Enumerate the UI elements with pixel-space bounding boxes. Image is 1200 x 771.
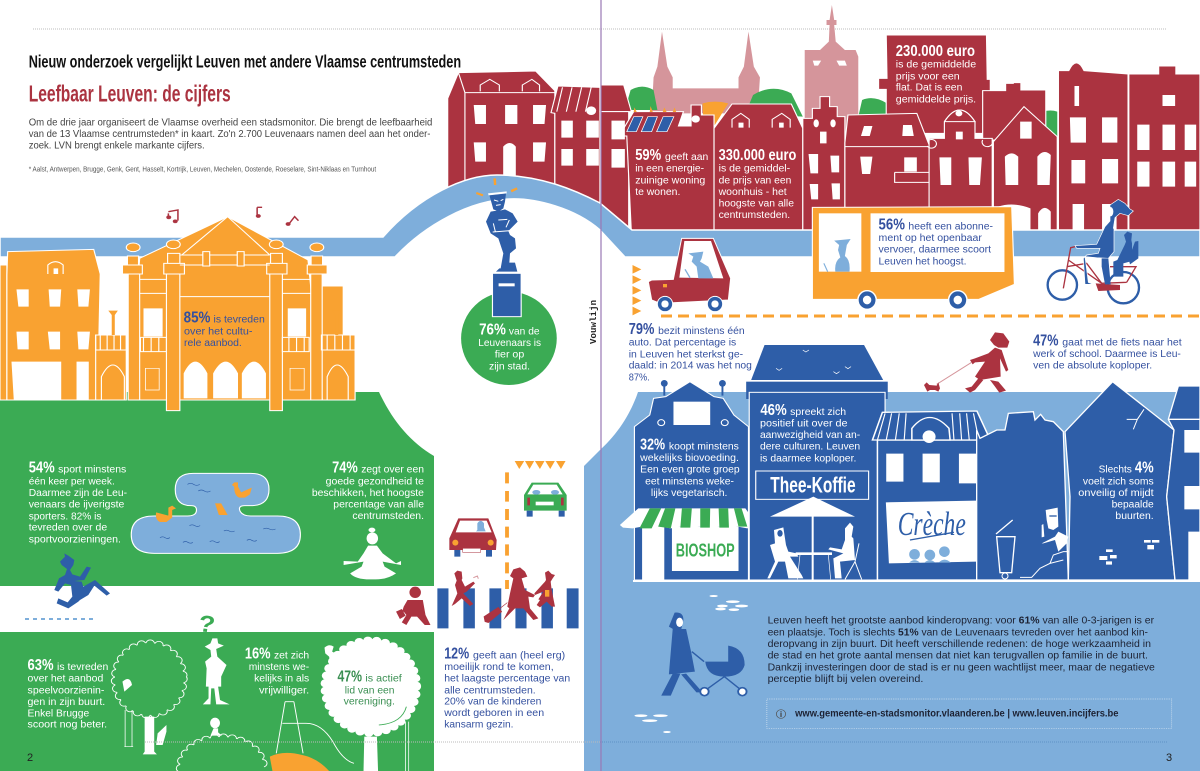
icon: woman with pram xyxy=(661,613,747,696)
text: childcare: een plaatsje. Toch is slechts 51% van de Leuvenaars tevreden over het aanbod kin- xyxy=(768,627,1148,638)
shop: Thee-Koffie building xyxy=(749,392,885,580)
shop: tall house xyxy=(1065,382,1175,580)
stat: 76% proud: Leuvenaars is xyxy=(478,338,541,349)
stat: 47% cycling: gaat met de fiets naar het xyxy=(1062,337,1182,348)
stat: 4% unsafe: Slechts xyxy=(1099,464,1132,475)
intro text: zoek. LVN brengt enkele markante cijfers. xyxy=(29,140,205,151)
stat: 79% car ownership xyxy=(629,319,752,383)
stat: 12% poverty: alle centrumsteden. xyxy=(444,685,536,696)
crossing: zebra stripes xyxy=(437,588,579,628)
icon: pond with ducks xyxy=(131,473,300,553)
stat: 32% organic food: Een even grote groep xyxy=(640,464,740,475)
stat: 12% poverty: het laagste percentage van xyxy=(444,673,570,684)
stat: 56% public transport: ment op het openbaar xyxy=(879,233,982,244)
stat: 47% association member: lid van een xyxy=(345,685,395,696)
stat: 74% health: 74% xyxy=(332,458,358,476)
intro text xyxy=(29,117,432,151)
panel: green sport area xyxy=(0,392,434,586)
orange houses and theatre xyxy=(0,217,355,411)
stat: 230.000 euro flat: prijs voor een xyxy=(896,71,960,82)
stat: 47% cycling: werk of school. Daarmee is Leu- xyxy=(1032,349,1181,360)
stat: 230.000 euro flat: 230.000 euro xyxy=(896,41,975,60)
stat: 47% association member: 47% xyxy=(337,667,362,685)
shop: BIOSHOP building: BIOSHOP xyxy=(676,541,735,561)
stat: 54% sport: Daarmee zijn de Leu- xyxy=(29,488,127,499)
stat: 59% energy efficient: in een energie- xyxy=(635,163,704,174)
icon: red car xyxy=(648,238,731,312)
intro text: van de 13 Vlaamse centrumsteden* in kaart. Zo'n 2.700 Leuvenaars namen deel aan het onder- xyxy=(29,129,431,140)
icon: pedestrians on crossing xyxy=(452,567,555,623)
stat: 12% poverty xyxy=(443,643,570,730)
stat: 85% culture: over het cultu- xyxy=(184,326,253,337)
stat: 63% playgrounds: is tevreden xyxy=(57,662,108,673)
stat: 47% cycling: ven de absolute koploper. xyxy=(1033,360,1152,371)
stat: 54% sport xyxy=(29,458,127,545)
stat: 16% volunteers: kelijks in als xyxy=(254,673,310,684)
stat: 12% poverty: geeft aan (heel erg) xyxy=(473,650,565,661)
stat: 32% organic food xyxy=(639,434,740,499)
stat: 330.000 euro house: hoogste van alle xyxy=(719,198,794,209)
stat: 230.000 euro flat xyxy=(896,41,976,105)
stat: 330.000 euro house xyxy=(718,145,796,221)
stat: 16% volunteers: zet zich xyxy=(274,650,309,661)
stat: 330.000 euro house: centrumsteden. xyxy=(719,210,790,221)
text: childcare: perceptie blijft bij velen overeind. xyxy=(768,674,923,685)
icon: boy with question mark xyxy=(197,611,230,704)
stat: 59% energy efficient: geeft aan xyxy=(665,152,708,163)
stat: 4% unsafe xyxy=(1078,458,1154,522)
stat: 47% association member: is actief xyxy=(365,673,403,684)
stat: 32% organic food: lijks vegetarisch. xyxy=(651,488,727,499)
stat: 76% proud: van de xyxy=(509,326,540,337)
icon: red car front xyxy=(449,518,497,557)
skyline: pink church and tower xyxy=(652,5,858,133)
stat: 54% sport: sport minstens xyxy=(58,464,127,475)
intro text: Om de drie jaar organiseert de Vlaamse overheid een stadsmonitor. Die brengt de leefbaarheid xyxy=(29,117,432,128)
stat: 46% other cultures: dere culturen. Leuven xyxy=(760,441,860,452)
text: childcare: Leuven heeft het grootste aanbod kinderopvang: voor 61% van alle 0-3-jarigen is er xyxy=(768,615,1154,626)
icon: orange bus xyxy=(812,207,1014,309)
stat: 330.000 euro house: is de gemiddel- xyxy=(719,163,790,174)
stat: 230.000 euro flat: is de gemiddelde xyxy=(896,59,976,70)
text: childcare: de stad en het grote aantal mensen dat niet kan terugvallen op familie in de buurt. xyxy=(768,650,1148,661)
stat: 47% association member xyxy=(337,667,403,707)
info box with links: i xyxy=(779,710,783,719)
stat: 63% playgrounds: over het aanbod xyxy=(28,673,103,684)
stat: 16% volunteers: vrijwilliger. xyxy=(259,685,309,696)
stat: 16% volunteers: 16% xyxy=(245,643,271,662)
stat: 79% car ownership: bezit minstens één xyxy=(658,326,745,337)
orange buildings: white windows and arches xyxy=(11,268,306,400)
shop: crèche building xyxy=(872,411,990,580)
shop: dark alley building xyxy=(977,412,1068,580)
stat: 59% energy efficient xyxy=(635,145,708,198)
stat: 330.000 euro house: woonhuis - het xyxy=(718,187,787,198)
stat: 56% public transport xyxy=(879,214,993,267)
stat: 4% unsafe: 4% xyxy=(1135,458,1154,476)
panel: green play area xyxy=(0,632,434,771)
stat: 85% culture xyxy=(184,308,265,349)
stat: 46% other cultures: positief uit over de xyxy=(760,418,848,429)
heading: title: Leefbaar Leuven: de cijfers xyxy=(29,81,231,107)
stat: 54% sport: tevreden over de xyxy=(29,522,107,533)
stat: 230.000 euro flat: gemiddelde prijs. xyxy=(896,94,976,105)
stat: 76% proud: zijn stad. xyxy=(489,361,530,372)
page number 2: 2 xyxy=(27,752,33,764)
stat: 230.000 euro flat: flat. Dat is een xyxy=(896,82,962,93)
stat: 47% association member: vereniging. xyxy=(344,696,395,707)
stat: 54% sport: sportvoorzieningen. xyxy=(29,534,121,545)
stat: 46% other cultures xyxy=(760,400,860,464)
stat: 54% sport: 54% xyxy=(29,458,55,476)
shop: BIOSHOP building xyxy=(620,380,757,580)
shop: crèche building: Crèche xyxy=(898,505,966,542)
stat: 4% unsafe: bepaalde xyxy=(1112,499,1154,510)
stat: 63% playgrounds: speelvoorzienin- xyxy=(28,685,105,696)
stat: 76% proud xyxy=(478,319,541,372)
stat: 330.000 euro house: de prijs van een xyxy=(719,175,791,186)
skyline: trees xyxy=(625,87,1057,140)
stat: 59% energy efficient: zuinige woning xyxy=(635,175,705,186)
stat: 76% proud: 76% xyxy=(479,319,506,338)
stat: 79% car ownership: in Leuven het sterkst ge- xyxy=(629,349,743,360)
text: childcare: deropvang in zijn buurt. Dit heeft verschillende redenen: de hoge werkzaamheid in xyxy=(768,639,1151,650)
stat: 79% car ownership: daald: in 2014 was het nog xyxy=(629,360,752,371)
stat: 79% car ownership: auto. Dat percentage is xyxy=(629,337,737,348)
stat: 74% health: goede gezondheid te xyxy=(326,476,424,487)
stat: 85% culture: rele aanbod. xyxy=(184,338,242,349)
icon: green car xyxy=(524,483,567,517)
icon: running figure xyxy=(54,553,110,608)
shop: house at right edge xyxy=(1167,386,1200,580)
skyline: house windows and details xyxy=(611,86,1196,230)
panel: lower right light blue background xyxy=(584,392,1200,771)
icon: music notes xyxy=(166,207,298,226)
info box with links: www.gemeente-en-stadsmonitor.vlaanderen.be | www.leuven.incijfers.be xyxy=(794,708,1118,719)
icon: bush with child, slide and orange bush xyxy=(180,702,354,771)
stat: 12% poverty: 12% xyxy=(444,643,469,662)
stat: 85% culture: is tevreden xyxy=(214,314,265,325)
icon: green circle and pedestal xyxy=(461,273,557,385)
icon: meditating person xyxy=(344,528,401,579)
footnote: * Aalst, Antwerpen, Brugge, Genk, Gent, Hasselt, Kortrijk, Leuven, Mechelen, Oostende, Roeselare, Sint-Niklaas en Turnhout xyxy=(29,165,377,173)
stat: 63% playgrounds: Enkel Brugge xyxy=(28,708,89,719)
stat: 59% energy efficient: te wonen. xyxy=(635,187,680,198)
stat: 79% car ownership: 87%. xyxy=(629,372,650,383)
stat: 16% volunteers xyxy=(245,643,310,696)
icon: woman walking dog xyxy=(924,332,1009,393)
stat: 32% organic food: 32% xyxy=(640,434,665,453)
stat: 12% poverty: kansarm gezin. xyxy=(444,719,514,730)
fold label: Vouwlijn xyxy=(589,300,599,344)
stat: 54% sport: venaars de ijverigste xyxy=(29,499,124,510)
stat: 63% playgrounds xyxy=(28,655,108,730)
stat: 63% playgrounds: gen in zijn buurt. xyxy=(28,697,105,708)
icon: statue xyxy=(476,178,518,272)
icon: pedestrian with bag xyxy=(396,587,430,625)
icon: woman on bicycle with child xyxy=(1048,199,1139,303)
stat: 4% unsafe: onveilig of mijdt xyxy=(1078,488,1154,499)
stat: 74% health: zegt over een xyxy=(361,464,424,475)
stat: 76% proud: fier op xyxy=(495,349,524,360)
shop: Thee-Koffie building: Thee-Koffie xyxy=(770,474,856,498)
heading: kicker: Nieuw onderzoek vergelijkt Leuven met andere Vlaamse centrumsteden xyxy=(29,52,461,71)
stat: 330.000 euro house: 330.000 euro xyxy=(719,145,796,164)
stat: 16% volunteers: minstens we- xyxy=(249,662,309,673)
stat: 32% organic food: eet minstens weke- xyxy=(645,476,734,487)
stat: 46% other cultures: aanwezigheid van an- xyxy=(760,430,860,441)
stat: 74% health: percentage van alle xyxy=(333,499,424,510)
icon: terrace with umbrella and two people xyxy=(767,497,862,580)
stat: 56% public transport: vervoer, daarmee scoort xyxy=(879,244,991,255)
stat: 85% culture: 85% xyxy=(184,308,210,326)
stat: 32% organic food: koopt minstens xyxy=(669,441,739,452)
stat: 54% sport: één keer per week. xyxy=(29,476,115,487)
stat: 12% poverty: wordt geboren in een xyxy=(443,708,544,719)
stat: 74% health: centrumsteden. xyxy=(352,511,424,522)
icon: boy with question mark: ? xyxy=(197,611,217,638)
icon: bin and man with knife xyxy=(996,508,1068,579)
stat: 46% other cultures: 46% xyxy=(760,400,787,419)
decorative footprints in snow xyxy=(634,595,748,733)
stat: 12% poverty: 20% van de kinderen xyxy=(444,696,541,707)
stat: 79% car ownership: 79% xyxy=(629,319,654,338)
shop: roof of culture building xyxy=(746,345,888,399)
stat: 47% cycling: 47% xyxy=(1033,331,1058,349)
stat: 54% sport: sporters. 82% is xyxy=(29,511,102,522)
crossing: road dashes and pennants xyxy=(505,461,566,589)
skyline: red houses, right page xyxy=(600,35,1200,233)
stat: 12% poverty: moeilijk rond te komen, xyxy=(444,662,554,673)
icon: orange triangles xyxy=(633,265,641,315)
text: childcare xyxy=(768,615,1155,685)
skyline: solar panels xyxy=(627,106,676,132)
stat: 46% other cultures: spreekt zich xyxy=(790,407,846,418)
info box with links xyxy=(767,699,1172,728)
stat: 46% other cultures: is daarmee koploper. xyxy=(760,453,856,464)
stat: 4% unsafe: voelt zich soms xyxy=(1083,476,1154,487)
stat: 32% organic food: wekelijks biovoeding. xyxy=(639,453,739,464)
icon: tree with swing xyxy=(115,643,184,754)
stat: 56% public transport: heeft een abonne- xyxy=(908,221,993,232)
icon: big white tree xyxy=(324,641,416,771)
stat: 56% public transport: Leuven het hoogst. xyxy=(879,256,967,267)
stat: 47% cycling xyxy=(1032,331,1182,371)
road: light blue band with arch xyxy=(0,175,1200,257)
stat: 59% energy efficient: 59% xyxy=(635,145,661,164)
stat: 63% playgrounds: scoort nog beter. xyxy=(28,719,107,730)
stat: 4% unsafe: buurten. xyxy=(1115,511,1154,522)
stat: 74% health: beschikken, het hoogste xyxy=(312,488,424,499)
stat: 63% playgrounds: 63% xyxy=(28,655,54,674)
page number 3: 3 xyxy=(1166,752,1172,764)
stat: 74% health xyxy=(312,458,424,522)
skyline: red houses, left page xyxy=(448,71,600,205)
text: childcare: Dankzij investeringen door de stad is er nu geen wachtlijst meer, maar de negatieve xyxy=(768,662,1155,673)
stat: 56% public transport: 56% xyxy=(879,214,905,233)
